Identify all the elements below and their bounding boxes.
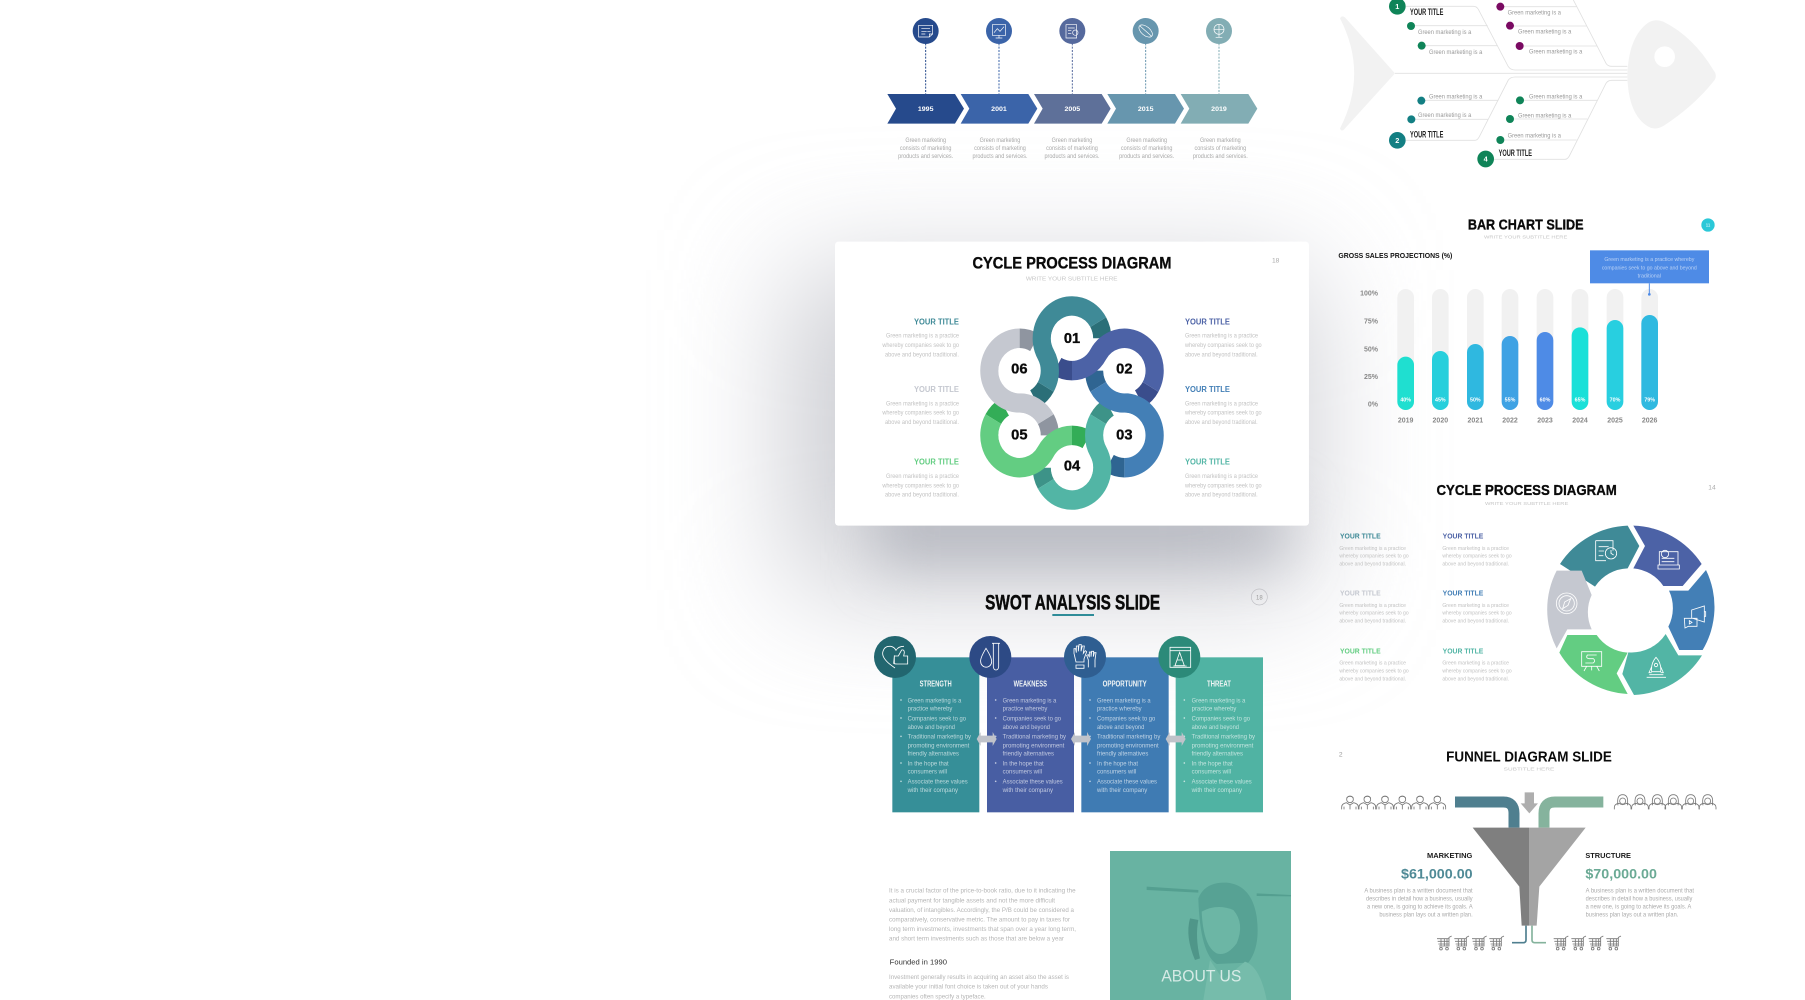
text column left: Green marketing is a practice <box>1339 603 1406 609</box>
bar 2024 <box>1572 327 1588 410</box>
structure block: STRUCTURE <box>1585 851 1631 860</box>
card opportunity: Traditional marketing by <box>1097 734 1161 741</box>
text column right: whereby companies seek to go <box>1441 669 1512 675</box>
text column left: YOUR TITLE <box>1340 648 1381 655</box>
panel: cycle process arrows slide <box>1338 483 1716 695</box>
about paragraph: long term investments, investments that span over a year long term, <box>889 926 1076 933</box>
text column right: whereby companies seek to go <box>1441 611 1512 617</box>
timeline descriptions: Green marketing <box>1126 137 1167 144</box>
left text blocks: above and beyond traditional. <box>885 419 959 426</box>
right text blocks <box>1184 317 1262 499</box>
left text blocks: YOUR TITLE <box>914 457 960 466</box>
chevron 2001: 2001 <box>991 106 1007 113</box>
title: CYCLE PROCESS DIAGRAM <box>1436 483 1617 499</box>
left text blocks: whereby companies seek to go <box>881 482 959 489</box>
badge 4: 4 <box>1484 155 1489 164</box>
right text blocks: whereby companies seek to go <box>1184 482 1262 489</box>
card weakness: Companies seek to go <box>1003 715 1061 722</box>
badge 1: 1 <box>1395 2 1399 11</box>
bar 2023: 60% <box>1540 398 1551 404</box>
y axis labels: 50% <box>1364 346 1379 353</box>
card weakness: promoting environment <box>1003 742 1064 749</box>
bar 2019 <box>1397 357 1414 410</box>
text column left: whereby companies seek to go <box>1338 554 1409 560</box>
card opportunity: Companies seek to go <box>1097 715 1156 722</box>
structure block: business plan lays out a written plan. <box>1586 913 1679 919</box>
structure block: a new one, is going to achieve its goals. A <box>1586 905 1691 911</box>
panel: funnel diagram slide <box>1339 750 1716 950</box>
ring 05 label <box>998 413 1040 457</box>
fish bones <box>1395 0 1627 159</box>
x axis labels: 2022 <box>1502 418 1518 425</box>
timeline descriptions: consists of marketing <box>900 145 952 152</box>
panel: timeline slide <box>887 18 1257 160</box>
card opportunity: practice whereby <box>1097 706 1142 713</box>
card strength: promoting environment <box>908 742 969 749</box>
x axis labels: 2020 <box>1433 418 1448 425</box>
y axis labels: 75% <box>1364 319 1379 326</box>
panel: bar chart slide <box>1338 217 1715 425</box>
x axis labels: 2019 <box>1398 418 1414 425</box>
text column left: whereby companies seek to go <box>1338 669 1409 675</box>
title: CYCLE PROCESS DIAGRAM <box>972 253 1171 272</box>
timeline descriptions: products and services. <box>898 153 953 160</box>
bar 2022: 55% <box>1505 398 1516 404</box>
fish tail <box>1340 16 1395 130</box>
card weakness: above and beyond <box>1003 724 1050 731</box>
arrow down <box>1521 792 1538 813</box>
card weakness: consumers will <box>1003 769 1042 776</box>
fishbone labels <box>1418 10 1583 140</box>
card strength: friendly alternatives <box>908 751 960 758</box>
left text blocks: whereby companies seek to go <box>881 342 959 349</box>
bar 2025: 70% <box>1610 398 1621 404</box>
right text blocks: YOUR TITLE <box>1185 317 1231 326</box>
right text blocks: Green marketing is a practice <box>1185 333 1258 340</box>
timeline descriptions: products and services. <box>972 153 1028 160</box>
card weakness: WEAKNESS <box>1014 679 1047 688</box>
bar 2020: 45% <box>1435 398 1446 404</box>
funnel body <box>1473 828 1586 926</box>
text column right: Green marketing is a practice <box>1442 661 1509 667</box>
card opportunity: above and beyond <box>1097 724 1145 731</box>
fish head <box>1627 20 1716 129</box>
chevron 2015: 2015 <box>1138 106 1154 113</box>
segment: sea green <box>1622 634 1702 695</box>
marketing block: a new one, is going to achieve its goals. A <box>1367 905 1473 911</box>
fishbone labels: Green marketing is a <box>1518 28 1572 35</box>
card threat: with their company <box>1191 787 1243 794</box>
marketing block <box>1364 851 1473 919</box>
text column left: Green marketing is a practice <box>1339 661 1406 667</box>
title: SWOT ANALYSIS SLIDE <box>985 590 1160 614</box>
ring 06 label: 06 <box>1011 362 1027 378</box>
fishbone labels: Green marketing is a <box>1418 112 1472 119</box>
timeline descriptions: products and services. <box>1193 153 1248 160</box>
bar 2026: 79% <box>1644 398 1655 404</box>
card strength: with their company <box>907 787 959 794</box>
chevron 2015 <box>1107 94 1184 124</box>
card threat: above and beyond <box>1192 724 1239 731</box>
card weakness: Associate these values <box>1003 779 1063 786</box>
card threat: promoting environment <box>1192 742 1253 749</box>
bar 2020 <box>1432 351 1449 410</box>
card threat: In the hope that <box>1192 760 1233 767</box>
badge 2 <box>1389 132 1406 149</box>
text column left <box>1338 533 1409 683</box>
ring 06 label <box>998 349 1040 393</box>
x axis labels: 2023 <box>1537 418 1553 425</box>
card threat: friendly alternatives <box>1192 751 1244 758</box>
fishbone titles: YOUR TITLE <box>1410 7 1443 17</box>
text column right: above and beyond traditional. <box>1442 619 1509 625</box>
card strength: STRENGTH <box>920 679 952 688</box>
y axis labels: 100% <box>1360 291 1379 298</box>
bar 2023 <box>1537 332 1553 410</box>
badge 1 <box>1389 0 1406 15</box>
fishbone titles: YOUR TITLE <box>1499 148 1532 158</box>
card strength: Traditional marketing by <box>908 734 972 741</box>
marketing block: A business plan is a written document that <box>1364 889 1473 895</box>
callout <box>1590 250 1709 283</box>
card opportunity <box>1081 657 1169 812</box>
right text blocks: above and beyond traditional. <box>1185 351 1258 358</box>
icon: chart monitor 2001 <box>986 18 1012 44</box>
card weakness: friendly alternatives <box>1003 751 1055 758</box>
left text blocks: YOUR TITLE <box>914 317 960 326</box>
fishbone dots <box>1407 3 1524 144</box>
icons: carts right <box>1554 936 1621 950</box>
fishbone labels: Green marketing is a <box>1529 94 1583 101</box>
card threat: practice whereby <box>1192 706 1237 713</box>
card weakness: Green marketing is a <box>1003 697 1057 704</box>
text column left: YOUR TITLE <box>1340 591 1381 598</box>
marketing block: MARKETING <box>1427 851 1473 860</box>
panel: about us <box>889 851 1291 1000</box>
icon: megaphone and chat <box>1684 606 1706 628</box>
left text blocks: whereby companies seek to go <box>881 410 959 417</box>
title: FUNNEL DIAGRAM SLIDE <box>1446 750 1612 766</box>
ring 03 label: 03 <box>1116 427 1132 443</box>
icons: carts left <box>1437 936 1504 950</box>
fishbone labels: Green marketing is a <box>1508 10 1561 17</box>
card opportunity: Associate these values <box>1097 779 1158 786</box>
card strength: practice whereby <box>908 706 953 713</box>
fishbone titles: YOUR TITLE <box>1410 129 1443 139</box>
text column right <box>1441 533 1512 683</box>
ring 01 label: 01 <box>1064 331 1080 347</box>
chevron 2019 <box>1181 94 1257 124</box>
icon: globe 2019 <box>1206 18 1232 44</box>
card threat: Associate these values <box>1192 779 1252 786</box>
right text blocks: Green marketing is a practice <box>1185 473 1258 480</box>
marketing block: $61,000.00 <box>1401 865 1473 881</box>
structure block: describes in detail how a business, usually <box>1586 897 1692 903</box>
panel: fishbone diagram <box>1340 0 1716 167</box>
icon: calendar note 1995 <box>913 18 939 44</box>
timeline descriptions: Green marketing <box>1200 137 1241 144</box>
marketing block: describes in detail how a business, usually <box>1366 897 1473 903</box>
text column left: Green marketing is a practice <box>1339 546 1406 552</box>
card strength: Green marketing is a <box>908 697 962 704</box>
bar 2022 <box>1502 336 1518 410</box>
timeline descriptions: consists of marketing <box>1194 145 1246 152</box>
page number badge: 18 <box>1256 595 1263 601</box>
bar 2021: 50% <box>1470 398 1481 404</box>
left text blocks: Green marketing is a practice <box>886 400 959 407</box>
card strength: consumers will <box>908 769 947 776</box>
bar 2026 <box>1641 315 1658 410</box>
about us heading: ABOUT US <box>1161 966 1241 985</box>
arrow 1 <box>977 732 997 746</box>
text column left: above and beyond traditional. <box>1339 619 1406 625</box>
y axis labels: 25% <box>1364 374 1379 381</box>
bar 2024: 65% <box>1575 398 1586 404</box>
panel: cycle process diagram card <box>835 242 1309 526</box>
segment: teal <box>1560 526 1639 587</box>
arrow 3 <box>1166 732 1186 746</box>
page number: 14 <box>1708 485 1716 492</box>
left text blocks: Green marketing is a practice <box>886 333 959 340</box>
card strength: above and beyond <box>908 724 955 731</box>
fishbone labels: Green marketing is a <box>1508 133 1561 140</box>
ring 02 label: 02 <box>1116 362 1132 378</box>
card threat: THREAT <box>1207 679 1231 688</box>
right text blocks: YOUR TITLE <box>1185 385 1231 394</box>
chevron 2019: 2019 <box>1211 106 1227 113</box>
structure block <box>1585 851 1694 919</box>
x axis labels: 2026 <box>1642 418 1658 425</box>
card threat: Companies seek to go <box>1192 715 1250 722</box>
callout: traditional <box>1638 274 1661 280</box>
timeline descriptions: Green marketing <box>1052 137 1093 144</box>
text column right: YOUR TITLE <box>1443 533 1484 540</box>
segment: green <box>1559 635 1628 694</box>
bar tracks <box>1397 289 1658 410</box>
fishbone labels: Green marketing is a <box>1418 29 1472 36</box>
card weakness: practice whereby <box>1003 706 1048 713</box>
icon: presentation board <box>1582 652 1602 671</box>
icon: compass <box>1556 593 1577 614</box>
text column right: Green marketing is a practice <box>1442 546 1509 552</box>
structure block: A business plan is a written document that <box>1586 889 1694 895</box>
subtitle: SUBTITLE HERE <box>1504 766 1554 771</box>
card weakness: with their company <box>1002 787 1054 794</box>
structure block: $70,000.00 <box>1585 865 1657 881</box>
timeline descriptions: Green marketing <box>905 137 946 144</box>
left text blocks: above and beyond traditional. <box>885 351 959 358</box>
bar 2021 <box>1467 344 1484 410</box>
text column left: above and beyond traditional. <box>1339 562 1406 568</box>
text column right: YOUR TITLE <box>1443 591 1484 598</box>
chevron 1995: 1995 <box>918 106 934 113</box>
card threat: Traditional marketing by <box>1192 734 1256 741</box>
page number: 2 <box>1339 752 1343 759</box>
fishbone labels: Green marketing is a <box>1429 49 1483 56</box>
badge 2: 2 <box>1395 136 1399 145</box>
right text blocks: whereby companies seek to go <box>1184 410 1262 417</box>
callout: companies seek to go above and beyond <box>1602 265 1697 271</box>
card threat: Green marketing is a <box>1192 697 1246 704</box>
icons: women <box>1614 795 1716 809</box>
ring 04 label: 04 <box>1064 458 1081 474</box>
page number badge: 11 <box>1706 223 1711 228</box>
icon: clipboard with clock <box>1596 541 1617 561</box>
title: BAR CHART SLIDE <box>1468 217 1584 233</box>
right text blocks: above and beyond traditional. <box>1185 492 1258 499</box>
left text blocks: Green marketing is a practice <box>886 473 959 480</box>
segment: gray <box>1547 571 1592 648</box>
segment: blue <box>1668 570 1715 650</box>
left text blocks <box>881 317 960 499</box>
text column right: above and beyond traditional. <box>1442 677 1509 683</box>
icon: laptop with dollar <box>1658 550 1679 569</box>
text column right: YOUR TITLE <box>1443 648 1484 655</box>
right text blocks: whereby companies seek to go <box>1184 342 1262 349</box>
card strength <box>892 657 979 812</box>
segment: indigo <box>1633 526 1702 586</box>
callout connector <box>1648 283 1651 296</box>
marketing block: business plan lays out a written plan. <box>1379 913 1473 919</box>
about paragraph <box>889 888 1076 942</box>
ring 03 label <box>1103 413 1145 457</box>
card strength: In the hope that <box>908 760 949 767</box>
card shadow backdrop <box>790 270 1310 590</box>
ring 02 label <box>1103 349 1145 393</box>
x axis labels: 2025 <box>1607 418 1623 425</box>
icon: rocket <box>1647 657 1666 677</box>
card opportunity: friendly alternatives <box>1097 751 1149 758</box>
chevron 1995 <box>887 94 964 124</box>
left text blocks: above and beyond traditional. <box>885 492 959 499</box>
page number: 18 <box>1272 258 1280 265</box>
title underline <box>1052 614 1094 616</box>
founded heading: Founded in 1990 <box>890 958 947 967</box>
card strength: Associate these values <box>908 779 968 786</box>
card weakness: In the hope that <box>1003 760 1044 767</box>
card weakness <box>987 657 1074 812</box>
text column right: whereby companies seek to go <box>1441 554 1512 560</box>
right text blocks: above and beyond traditional. <box>1185 419 1258 426</box>
pipe left <box>1455 802 1514 828</box>
subtitle: WRITE YOUR SUBTITLE HERE <box>1484 235 1568 241</box>
x axis labels <box>1398 418 1658 425</box>
card background <box>835 242 1309 526</box>
card opportunity: consumers will <box>1097 769 1137 776</box>
fishbone titles <box>1410 7 1532 158</box>
timeline descriptions <box>898 137 1248 160</box>
right text blocks: Green marketing is a practice <box>1185 400 1258 407</box>
ring 04 label <box>1051 445 1093 490</box>
card opportunity: Green marketing is a <box>1097 697 1151 704</box>
card threat <box>1176 657 1263 812</box>
founded paragraph: Investment generally results in acquiring an asset also the asset is <box>889 974 1070 981</box>
outlet pipes <box>1512 926 1546 943</box>
icon: heart and thumb <box>874 636 916 678</box>
timeline connector lines <box>926 43 1219 94</box>
founded paragraph: available your initial font choice is taken out of your hands <box>889 984 1049 991</box>
card strength: Companies seek to go <box>908 715 966 722</box>
y axis labels: 0% <box>1368 402 1379 409</box>
ring 05 label: 05 <box>1011 427 1027 443</box>
text column left: above and beyond traditional. <box>1339 677 1406 683</box>
icons: men <box>1342 796 1446 809</box>
fishbone labels: Green marketing is a <box>1529 48 1583 55</box>
founded paragraph <box>889 974 1070 1000</box>
chevron 2005: 2005 <box>1064 106 1080 113</box>
timeline descriptions: Green marketing <box>980 137 1021 144</box>
subtitle: WRITE YOUR SUBTITLE HERE <box>1485 501 1569 507</box>
arrow 2 <box>1071 732 1091 746</box>
callout: Green marketing is a practice whereby <box>1604 257 1695 263</box>
text column left: YOUR TITLE <box>1340 533 1381 540</box>
bar 2019: 40% <box>1400 398 1411 404</box>
fishbone labels: Green marketing is a <box>1429 94 1483 101</box>
chart heading: GROSS SALES PROJECTIONS (%) <box>1338 251 1453 260</box>
page number badge <box>1701 218 1715 232</box>
interlocking ring diagram <box>978 306 1166 500</box>
card weakness: Traditional marketing by <box>1003 734 1067 741</box>
about us photo panel <box>1110 851 1291 1000</box>
timeline descriptions: consists of marketing <box>1046 145 1098 152</box>
icon: window with cone <box>1158 636 1200 678</box>
text column right: above and beyond traditional. <box>1442 562 1509 568</box>
about paragraph: valuation, of intangibles. Accordingly, the P/B could be considered a <box>889 907 1074 914</box>
y axis labels <box>1360 291 1379 409</box>
card threat: consumers will <box>1192 769 1231 776</box>
chevron 2001 <box>961 94 1037 124</box>
text column right: Green marketing is a practice <box>1442 603 1509 609</box>
right text blocks: YOUR TITLE <box>1185 457 1231 466</box>
text column left: whereby companies seek to go <box>1338 611 1409 617</box>
card opportunity: with their company <box>1096 787 1148 794</box>
icon: leaf 2015 <box>1133 18 1159 44</box>
timeline descriptions: products and services. <box>1044 153 1100 160</box>
about paragraph: comparatively, conservative metric. The amount to pay in taxes for <box>889 916 1071 923</box>
x axis labels: 2021 <box>1468 418 1483 425</box>
chevron 2005 <box>1034 94 1111 124</box>
about paragraph: and short term investments such as those that are below a year <box>889 935 1065 942</box>
icon: drop and test tube <box>969 636 1011 678</box>
fishbone labels: Green marketing is a <box>1518 112 1572 119</box>
ring 01 label <box>1051 316 1093 361</box>
about paragraph: It is a crucial factor of the price-to-book ratio, due to it indicating the <box>889 888 1076 895</box>
badge 4 <box>1477 151 1494 167</box>
pipe right <box>1544 802 1603 828</box>
about paragraph: actual payment for tangible assets and not the more difficult <box>889 897 1055 904</box>
timeline descriptions: consists of marketing <box>1121 145 1173 152</box>
icon: gloves <box>1064 636 1106 678</box>
page number badge <box>1251 589 1267 605</box>
left text blocks: YOUR TITLE <box>914 385 960 394</box>
timeline descriptions: consists of marketing <box>974 145 1026 152</box>
x axis labels: 2024 <box>1572 418 1588 425</box>
timeline descriptions: products and services. <box>1119 153 1174 160</box>
card opportunity: In the hope that <box>1097 760 1138 767</box>
bar 2025 <box>1607 320 1623 410</box>
card opportunity: OPPORTUNITY <box>1103 679 1147 688</box>
panel: SWOT analysis slide <box>874 589 1267 812</box>
icon: document target 2005 <box>1059 18 1085 44</box>
card opportunity: promoting environment <box>1097 742 1159 749</box>
subtitle: WRITE YOUR SUBTITLE HERE <box>1026 277 1118 283</box>
